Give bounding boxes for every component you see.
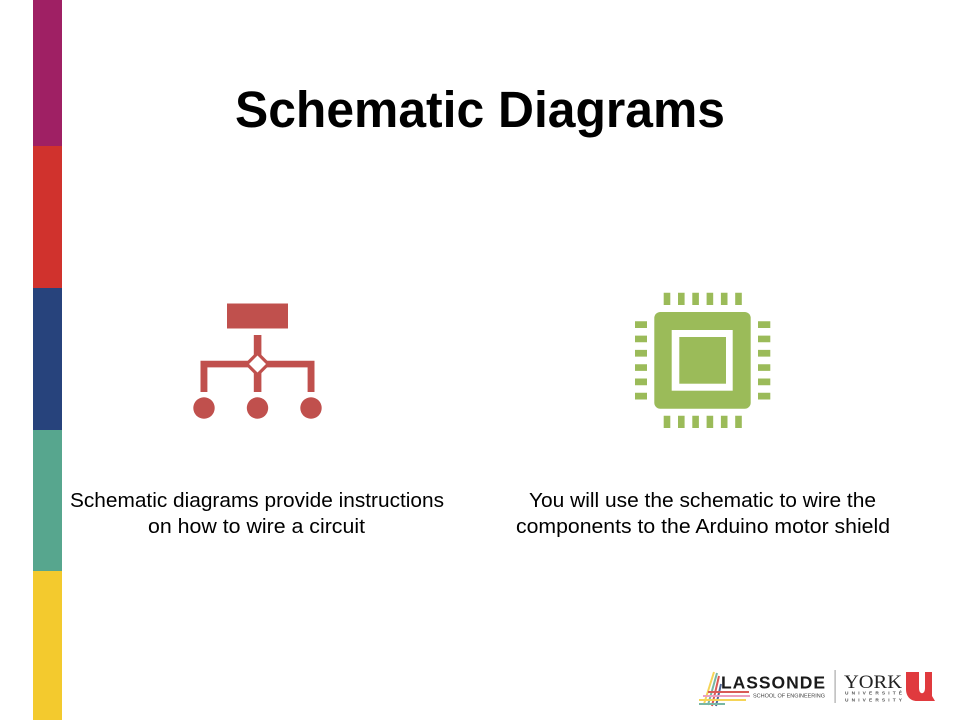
text: arduino description [516,490,890,538]
logo: Lassonde and York University: UNIVERSITY [845,698,903,704]
logo wordmark: York: YORK [844,672,902,693]
icon: schematic hierarchy [193,304,322,419]
text: schematic description: on how to wire a circuit [148,516,365,538]
text: arduino description: components to the Arduino motor shield [516,516,890,538]
logo: Lassonde and York University [699,670,935,706]
logo divider [834,670,836,703]
icon: microchip [635,293,770,428]
colour stripe sidebar [33,0,62,720]
logo mark: coloured lines [699,672,750,706]
logo: Lassonde and York University: SCHOOL OF ENGINEERING [753,694,825,700]
logo mark: red York U [906,672,935,701]
logo: Lassonde and York University: UNIVERSITÉ [845,688,903,696]
text: schematic description: Schematic diagrams provide instructions [70,490,444,512]
text: arduino description: You will use the schematic to wire the [529,490,876,512]
text: schematic description [70,490,444,538]
title: Schematic Diagrams [235,81,725,138]
logo wordmark: Lassonde: LASSONDE [721,672,825,692]
